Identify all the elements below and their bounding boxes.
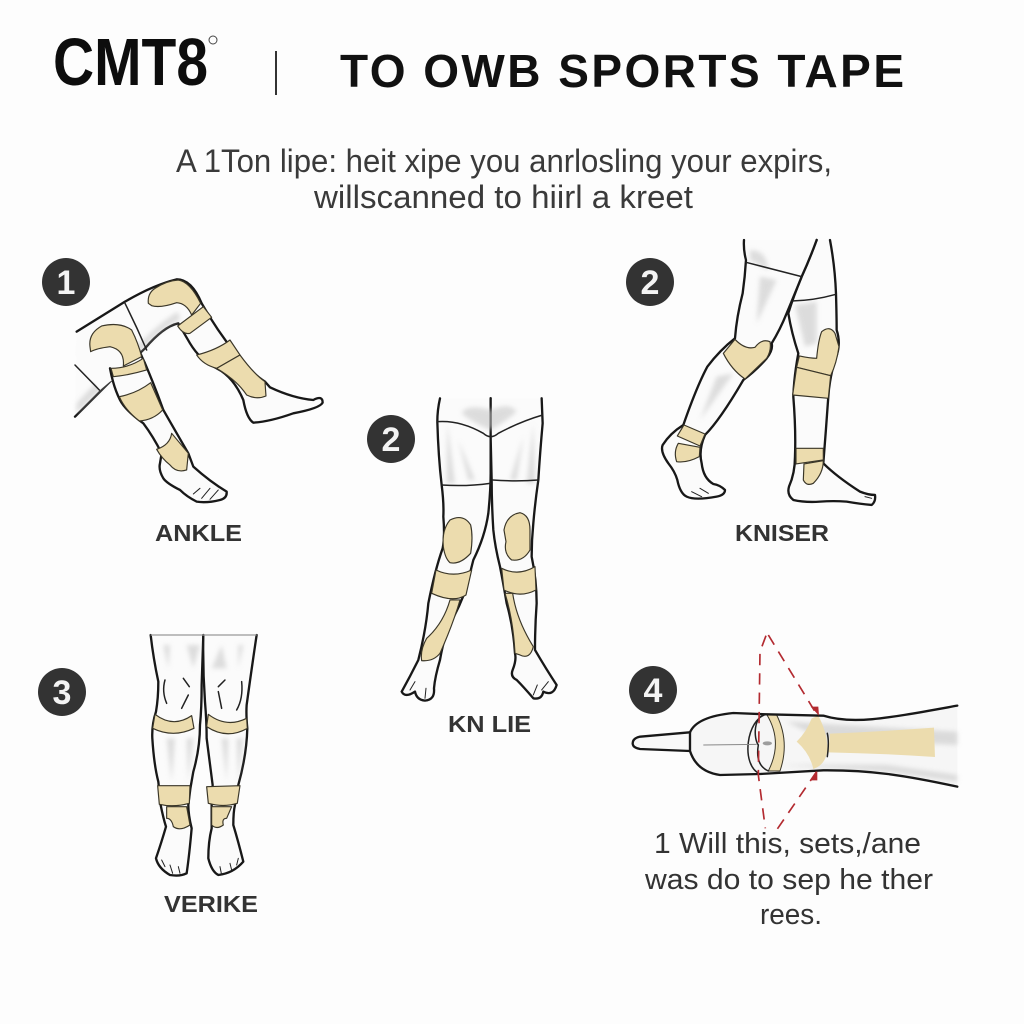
label: kniser: KNISER (735, 520, 829, 546)
subtitle text block (176, 143, 832, 215)
title: header divider (275, 51, 277, 95)
panel: ankle seated legs (42, 258, 323, 546)
badge: step 2 right (626, 258, 674, 306)
badge: step 1: 1 (57, 264, 75, 302)
badge: step 2 centre (367, 415, 415, 463)
illustration: rear legs with tape (151, 635, 257, 876)
panel: side view limb (629, 635, 957, 931)
caption text block (644, 828, 933, 931)
panel: front view legs centre (367, 398, 557, 737)
badge: step 3: 3 (53, 674, 71, 712)
illustration: seated legs with tape (75, 279, 323, 502)
label: verike: VERIKE (164, 891, 258, 917)
illustration: front legs with tape (402, 398, 557, 701)
badge: step 2 right: 2 (641, 264, 659, 302)
title: brand logo: CMT8 (53, 25, 208, 100)
badge: step 3 (38, 668, 86, 716)
caption text block: 1 Will this, sets,/ane (654, 828, 921, 860)
near leg (75, 323, 145, 390)
label: ankle: ANKLE (155, 520, 242, 546)
badge: step 4: 4 (644, 672, 663, 710)
panel: walking legs (626, 240, 875, 546)
label: kn lie: KN LIE (448, 711, 531, 737)
badge: step 1 (42, 258, 90, 306)
subtitle text block: A 1Ton lipe: heit xipe you anrlosling your expirs, (176, 143, 832, 179)
subtitle text block: willscanned to hiirl a kreet (313, 179, 693, 215)
illustration: walking legs with tape (662, 240, 875, 505)
badge: step 4 (629, 666, 677, 714)
illustration: limb side view with tape and dashed guide (633, 635, 957, 830)
caption text block: was do to sep he ther (644, 864, 933, 896)
panel: straight legs (38, 635, 258, 917)
title: heading: TO OWB SPORTS TAPE (340, 45, 904, 97)
caption text block: rees. (760, 899, 822, 931)
badge: step 2 centre: 2 (382, 421, 400, 459)
